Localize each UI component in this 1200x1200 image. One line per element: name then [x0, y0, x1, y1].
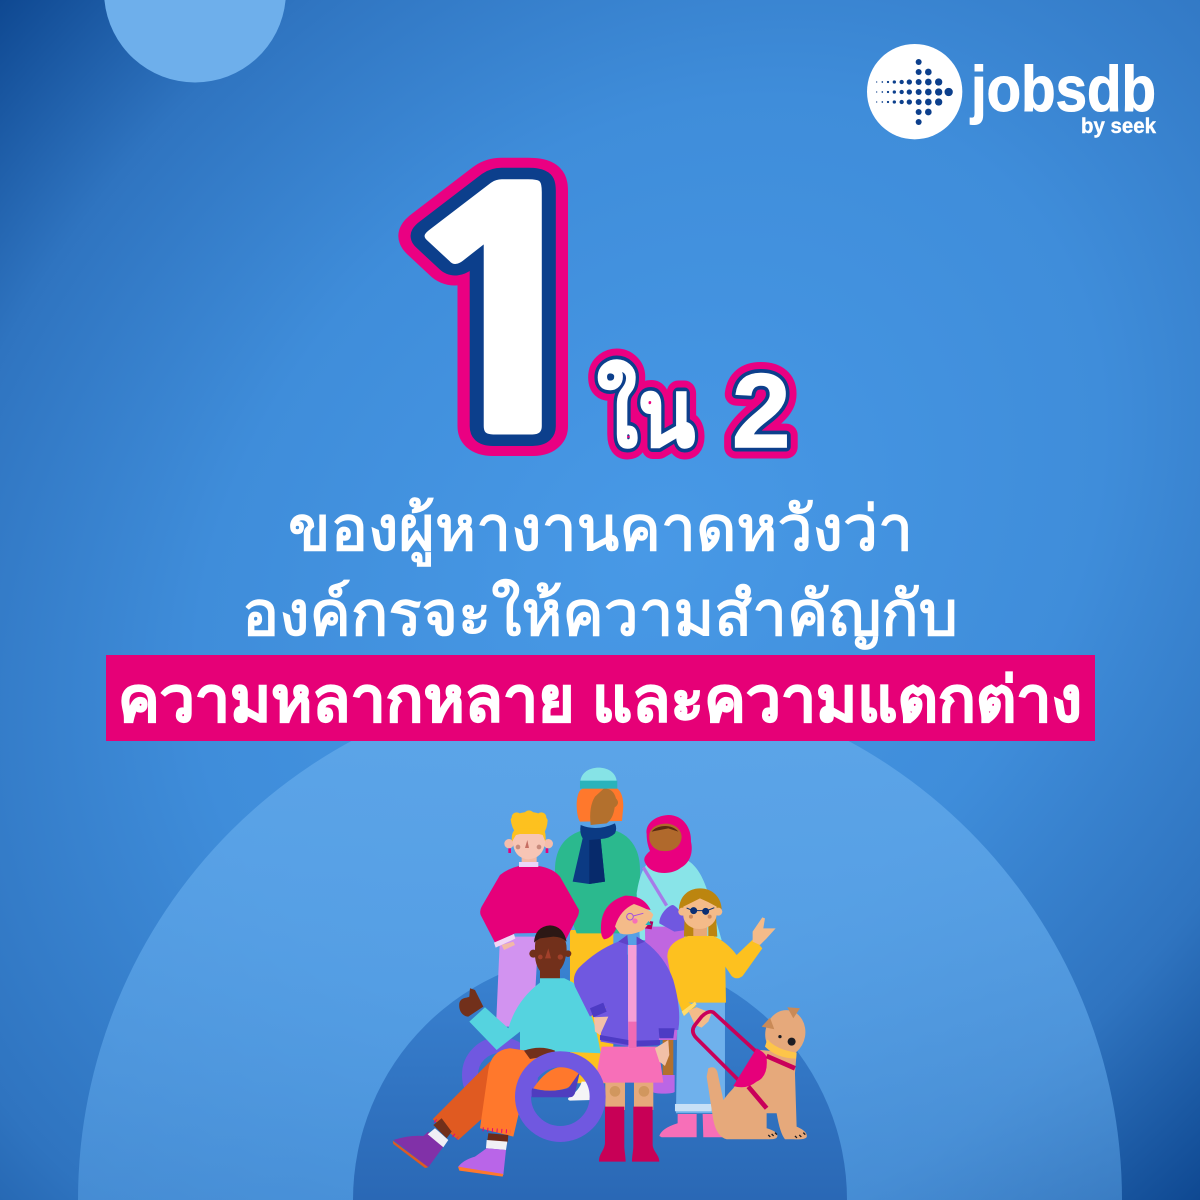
ใน 2	[597, 353, 790, 470]
wheelchair back wheel	[470, 1045, 530, 1105]
big number 1: 1	[384, 155, 625, 480]
wordmark: jobsdb	[970, 53, 1156, 125]
highlight banner: ความหลากหลาย และความแตกต่าง	[118, 666, 1082, 735]
tagline: by seek	[1081, 115, 1156, 138]
ใน 2: 2	[732, 353, 790, 470]
decorative circle top	[104, 0, 286, 82]
heading line 1: ของผู้หางานคาดหวังว่า	[288, 495, 913, 566]
person: woman in yellow sweater with glasses	[659, 888, 776, 1137]
big number 1: 1	[384, 155, 625, 480]
person: woman with teal hat	[555, 768, 640, 1101]
ใน 2: ใน	[597, 360, 695, 466]
ใน 2: 2	[732, 353, 790, 470]
ใน 2: ใน	[597, 360, 695, 466]
person: blonde person in pink sweater	[480, 810, 579, 1027]
icon: arrow of dots	[867, 44, 962, 139]
dog with harness	[693, 1007, 809, 1139]
heading line 2: องค์กรจะให้ความสำคัญกับ	[242, 579, 958, 649]
person: woman in hijab	[637, 815, 722, 1094]
decorative large semicircle	[78, 678, 1122, 1200]
ใน 2: ใน	[597, 360, 695, 466]
person: woman with pink hair and purple jacket	[574, 896, 679, 1162]
illustration: diverse group of people	[393, 768, 809, 1177]
person: man in wheelchair	[393, 925, 601, 1177]
logo: jobsdb by seek	[867, 44, 1156, 139]
big number 1: 1	[384, 155, 625, 480]
front wheel of wheelchair	[523, 1059, 598, 1134]
decorative inner semicircle	[353, 953, 847, 1200]
ใน 2: 2	[732, 353, 790, 470]
